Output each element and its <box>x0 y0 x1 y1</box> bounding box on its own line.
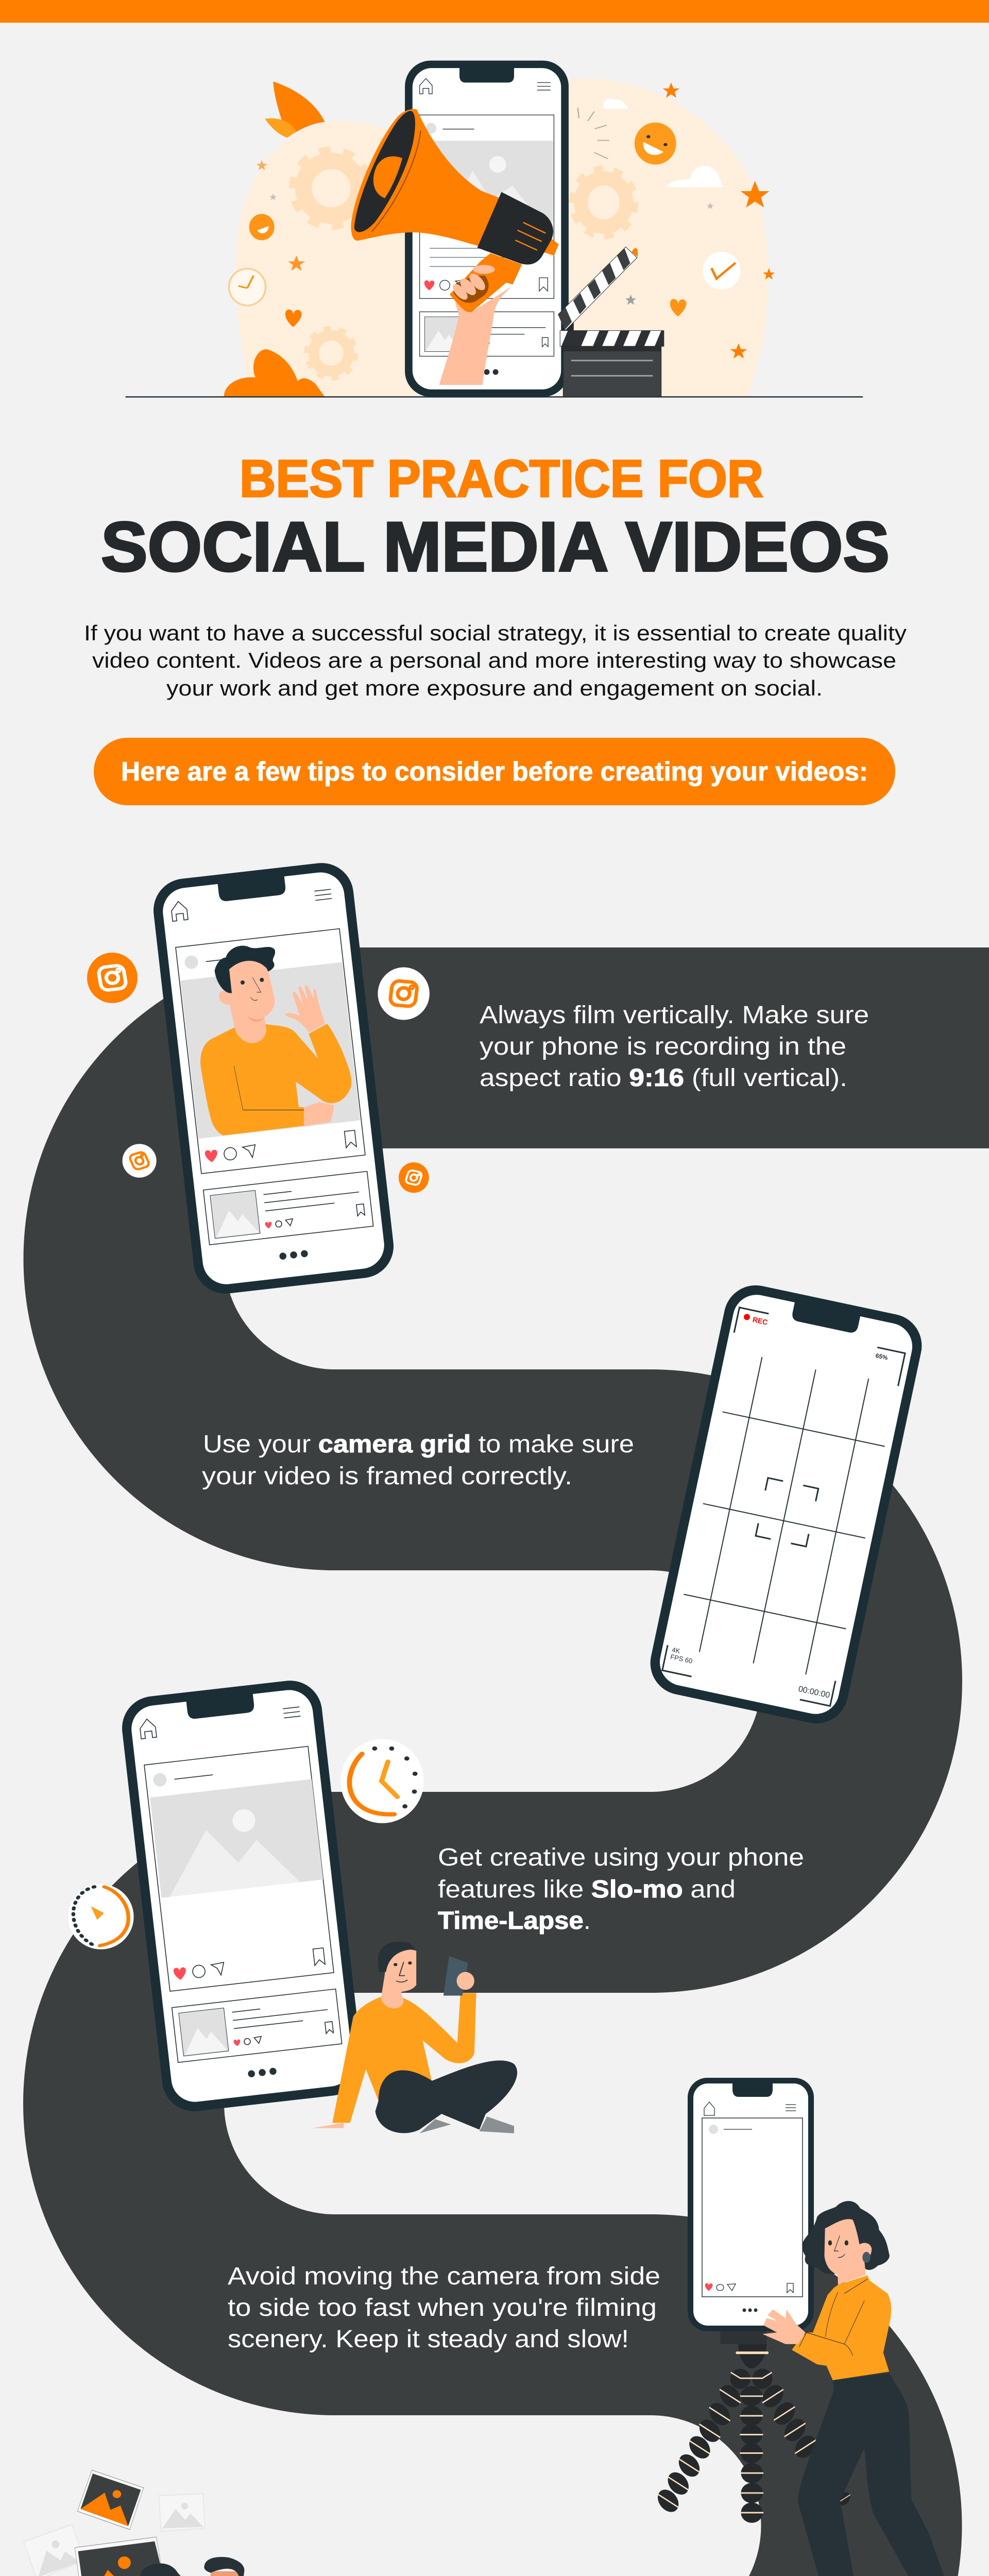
phone 4 on tripod <box>688 2078 814 2331</box>
shirt <box>792 2275 891 2380</box>
cream background blobs <box>236 78 769 397</box>
face <box>824 2219 872 2285</box>
tip 4 text <box>228 2263 660 2353</box>
hand <box>762 2310 806 2344</box>
tip 3 text <box>438 1844 804 1935</box>
waving man <box>200 946 351 1136</box>
focus brackets <box>756 1478 819 1547</box>
photo frames <box>24 2470 205 2576</box>
intro text: your work and get more exposure and engagement on social. <box>166 676 823 700</box>
orange pill callout <box>94 738 895 805</box>
rec label <box>743 1313 769 1327</box>
top orange bar <box>0 0 989 23</box>
tip 1 text: aspect ratio 9:16 (full vertical). <box>480 1064 847 1092</box>
trousers <box>798 2373 946 2576</box>
badge large white <box>378 968 430 1020</box>
grid lines <box>673 1350 898 1681</box>
clock large <box>340 1739 424 1823</box>
faint photo left <box>24 2524 80 2576</box>
image placeholder <box>150 1779 323 1898</box>
badge small white <box>123 1144 157 1178</box>
tip 3 text: Time-Lapse . <box>438 1907 591 1935</box>
viewfinder corners <box>662 1308 907 1706</box>
woman holding phone on tripod <box>762 2201 951 2576</box>
tip 4 text: to side too fast when you're filming <box>228 2294 657 2321</box>
tip 1 text: your phone is recording in the <box>480 1033 846 1060</box>
header illustration backdrop <box>126 78 863 397</box>
hair <box>803 2201 890 2274</box>
title line 2: SOCIAL MEDIA VIDEOS <box>101 507 890 586</box>
tip 2 text: your video is framed correctly. <box>202 1463 572 1490</box>
badge small orange <box>399 1162 429 1193</box>
title <box>101 449 890 586</box>
dark photo large <box>75 2537 161 2576</box>
dark photo small <box>77 2470 144 2530</box>
tip 4 text: Avoid moving the camera from side <box>228 2263 660 2290</box>
megaphone <box>351 109 559 312</box>
intro text: video content. Videos are a personal and more interesting way to showcase <box>92 648 896 672</box>
man <box>188 2557 337 2576</box>
ground line <box>126 396 863 398</box>
phone 3: feed with image <box>118 1677 366 2114</box>
phone 2: camera grid <box>644 1279 928 1730</box>
battery label: 65% <box>875 1352 889 1362</box>
title line 1: BEST PRACTICE FOR <box>240 449 763 508</box>
tip 1 text <box>480 1002 869 1092</box>
intro text: If you want to have a successful social strategy, it is essential to create quality <box>84 621 907 645</box>
fingers <box>450 265 495 303</box>
man sitting with phone <box>312 1942 517 2133</box>
tip 4 text: scenery. Keep it steady and slow! <box>228 2326 629 2353</box>
faint photo top <box>159 2494 205 2531</box>
tip 2 text <box>202 1431 634 1490</box>
resolution label: FPS 60 <box>670 1653 693 1665</box>
rec label: REC <box>752 1315 769 1327</box>
instagram badges <box>87 953 430 1193</box>
badge large orange <box>87 953 138 1003</box>
arm <box>439 287 511 385</box>
header phone with feed <box>405 61 569 397</box>
woman <box>97 2564 223 2576</box>
orange pill callout: Here are a few tips to consider before creating your videos: <box>121 757 868 787</box>
megaphone with hand and clapperboard <box>351 109 664 397</box>
gears <box>294 151 634 378</box>
clapperboard <box>558 247 664 397</box>
timecode: 00:00:00 <box>797 1685 831 1700</box>
tip 2 text: Use your camera grid to make sure <box>203 1431 634 1458</box>
phone 1: vertical post with waving man <box>150 860 397 1297</box>
intro text <box>84 621 907 700</box>
tip 3 text: Get creative using your phone <box>438 1844 804 1871</box>
resolution label: 4K <box>671 1646 681 1655</box>
orange leaves <box>224 81 325 397</box>
small decorations: stars, hearts, emoji, clock, clouds <box>229 82 775 359</box>
winding road <box>23 947 989 2576</box>
tip 3 text: features like Slo-mo and <box>438 1876 736 1903</box>
tripod <box>655 2331 852 2523</box>
clock small <box>68 1884 134 1950</box>
clock icons <box>68 1739 424 1950</box>
tip 1 text: Always film vertically. Make sure <box>480 1002 869 1029</box>
couple taking a selfie <box>97 2557 337 2576</box>
